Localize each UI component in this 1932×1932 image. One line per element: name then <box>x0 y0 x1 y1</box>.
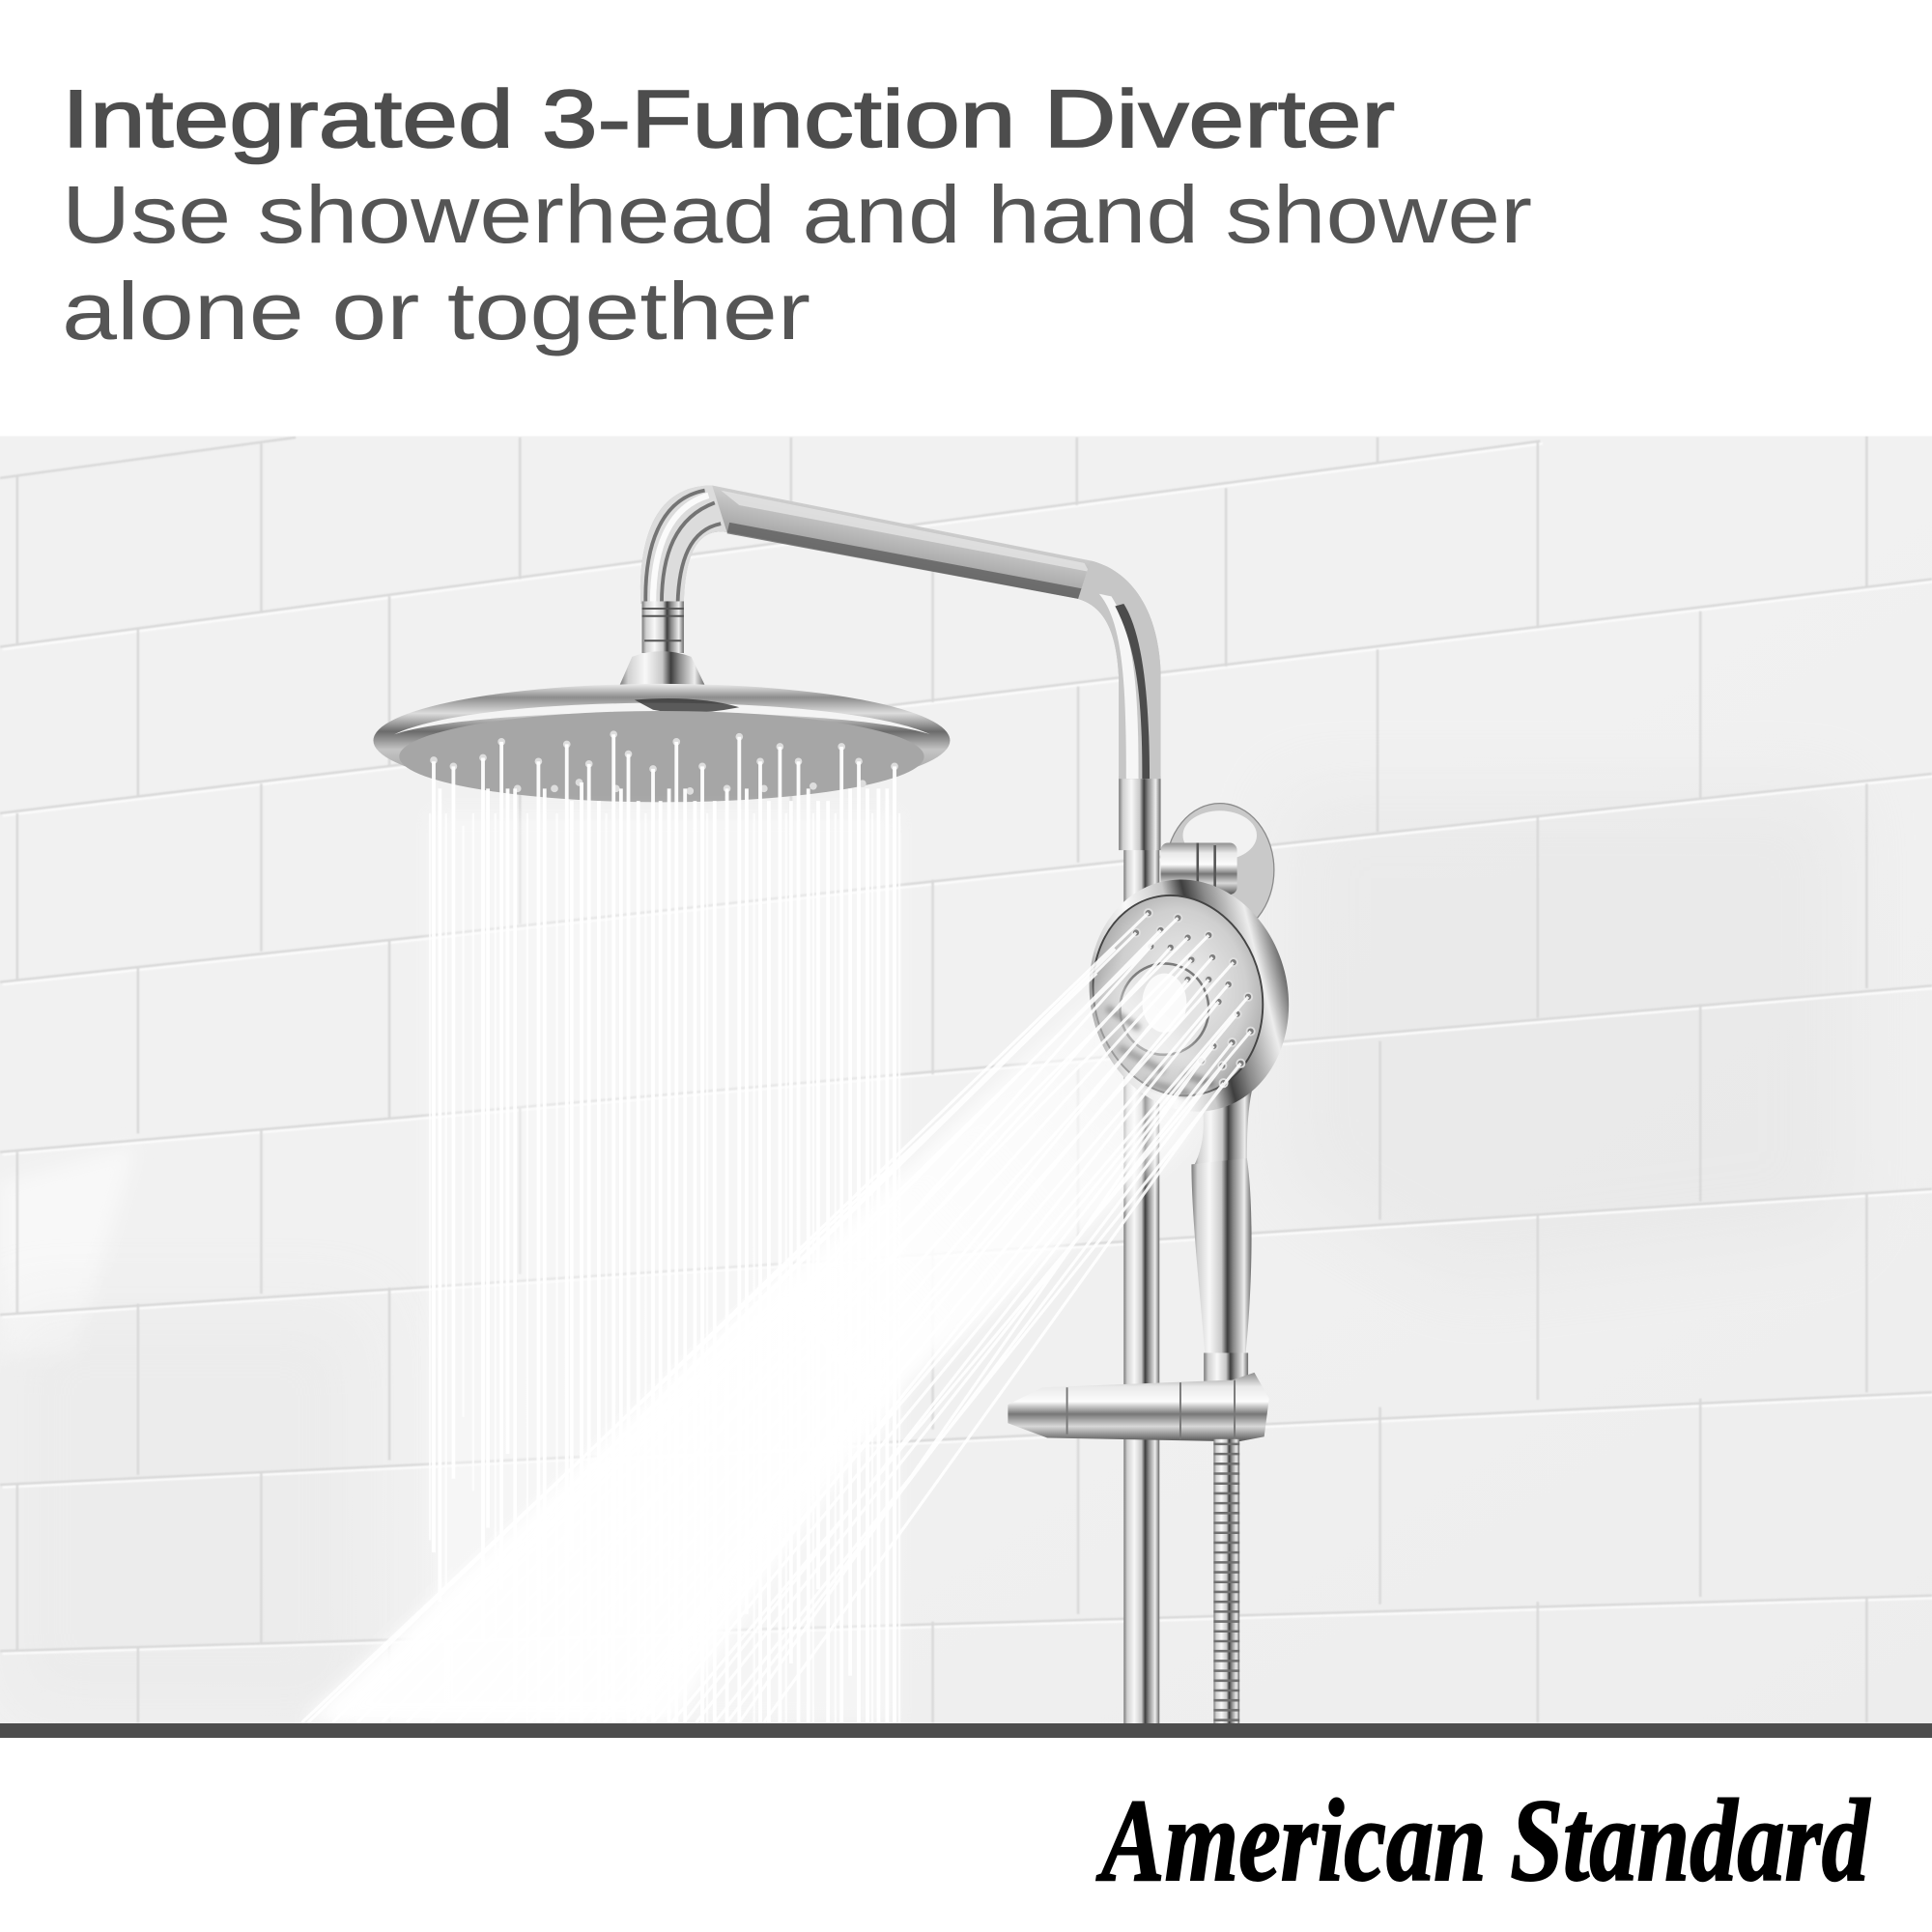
upper riser sleeve <box>1119 777 1161 850</box>
center disc <box>1142 974 1186 1033</box>
nozzles <box>430 730 898 795</box>
mount connector <box>1161 842 1237 895</box>
neck reflections <box>645 491 721 604</box>
nozzle face <box>399 711 924 802</box>
rain haze <box>436 815 893 1631</box>
rim highlight <box>394 703 930 734</box>
shower arm <box>640 486 1161 1727</box>
handle base <box>1204 1353 1248 1382</box>
arm top highlight <box>721 491 1090 572</box>
hand shower head <box>1065 858 1313 1133</box>
hand shower handle <box>1191 1091 1252 1382</box>
hose coils <box>1213 1444 1239 1720</box>
handle neck <box>1193 1091 1252 1168</box>
title <box>62 73 1532 356</box>
clamp body <box>1008 1373 1269 1441</box>
heading line: Integrated 3-Function Diverter <box>62 73 1395 164</box>
grip <box>1191 1158 1252 1355</box>
curved arm <box>640 486 1161 779</box>
subheading line 2: alone or together <box>62 266 810 356</box>
dense spray base <box>321 1269 887 1722</box>
spray mass <box>301 974 1220 1722</box>
face nozzles <box>1132 909 1255 1087</box>
neck highlight <box>653 496 708 604</box>
connector ring <box>1198 842 1215 895</box>
riser bend dark reflection <box>1115 604 1150 779</box>
rain secondary streams <box>430 813 899 1722</box>
center ring <box>1120 963 1208 1055</box>
arm underside shadow <box>727 523 1092 601</box>
riser bend <box>1078 560 1161 779</box>
wall mount <box>1161 803 1275 918</box>
tile wall <box>0 437 1932 1723</box>
subheading line 1: Use showerhead and hand shower <box>62 169 1532 260</box>
slider clamp <box>1008 1373 1269 1441</box>
spray face <box>1072 877 1284 1114</box>
clamp divider <box>1067 1380 1235 1441</box>
rain streams <box>434 734 895 1722</box>
flexible hose <box>1213 1439 1239 1725</box>
neck rings <box>642 609 684 640</box>
dark reflections <box>1106 1008 1213 1094</box>
mount highlight <box>1182 810 1257 860</box>
lower riser bar <box>1123 779 1159 1727</box>
spray jets <box>301 913 1251 1722</box>
mount disc <box>1169 803 1275 918</box>
outer shell <box>1065 858 1313 1133</box>
riser bend highlight <box>1099 594 1139 779</box>
photo panel: shower on tile wall <box>0 437 1932 1727</box>
collar <box>620 651 705 685</box>
swivel neck <box>642 601 684 653</box>
rim dark reflection <box>635 698 739 713</box>
dark divider bar <box>0 1723 1932 1738</box>
rain showerhead <box>373 601 950 802</box>
hand shower spray <box>301 913 1251 1722</box>
rain water from showerhead <box>430 734 899 1722</box>
outer disc <box>373 684 951 767</box>
neck chrome shading <box>640 486 727 604</box>
